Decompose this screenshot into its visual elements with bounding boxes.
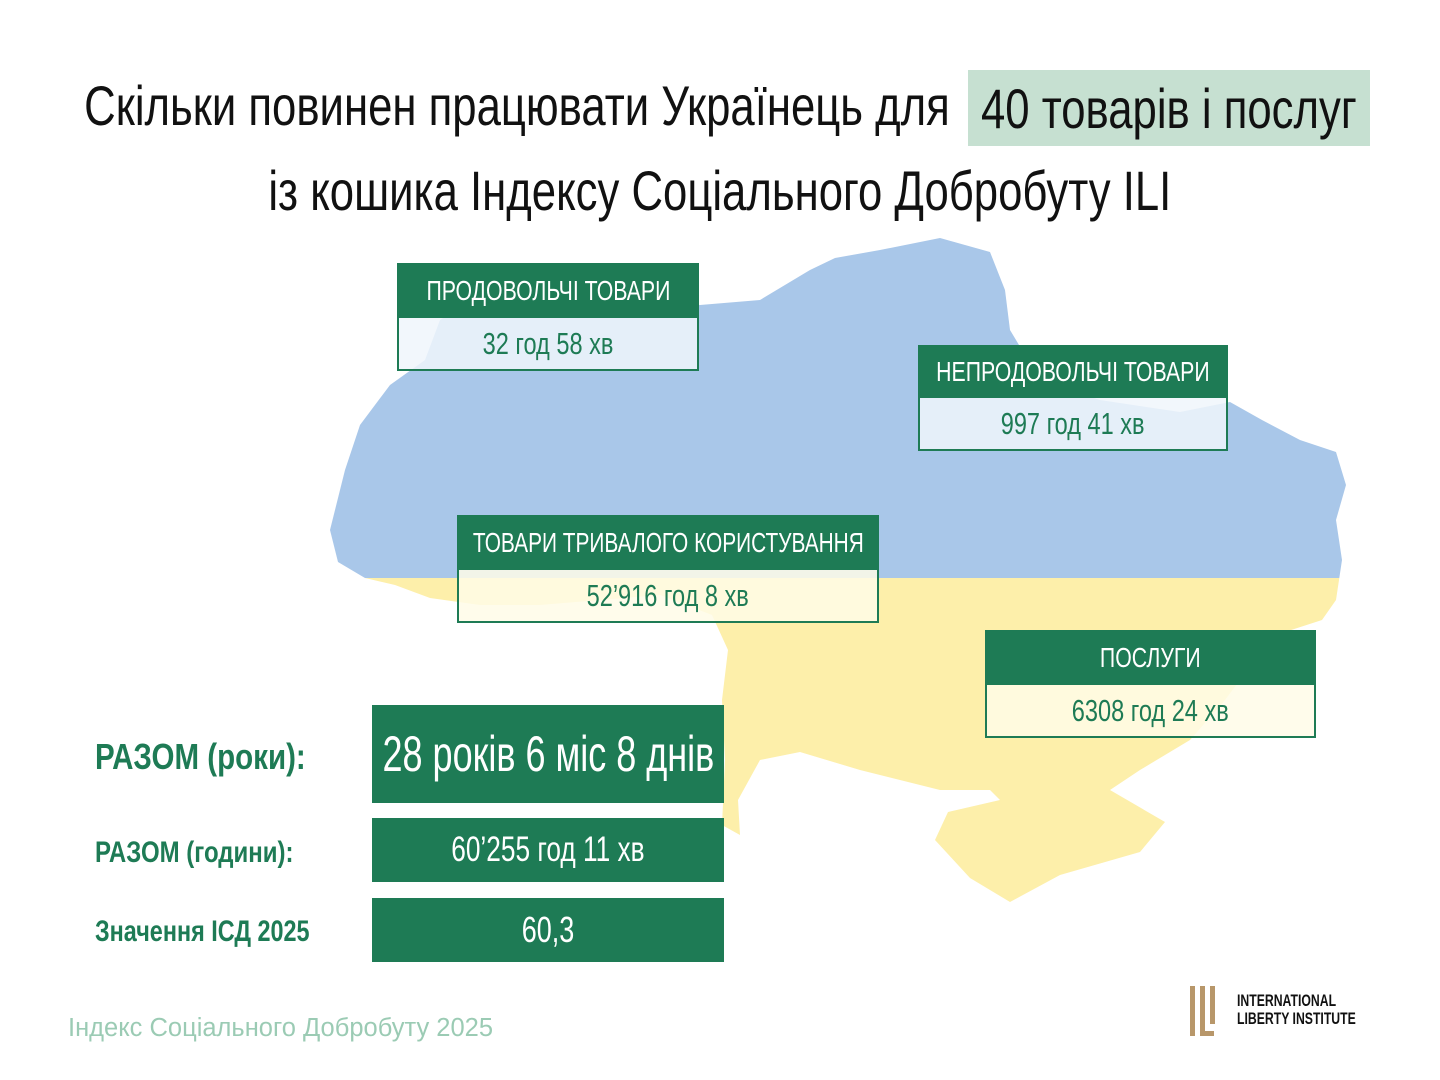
title: Скільки повинен працювати Українець для [84, 74, 950, 136]
label: total hours: РАЗОМ (години): [95, 836, 294, 869]
panel: durable: 52’916 год 8 хв [587, 578, 749, 612]
logo: INTERNATIONAL [1237, 991, 1336, 1010]
panel: non-food: НЕПРОДОВОЛЬЧІ ТОВАРИ [936, 356, 1210, 386]
panel: food: 32 год 58 хв [483, 326, 613, 360]
index box [372, 898, 724, 962]
panel: services: 6308 год 24 хв [1072, 692, 1229, 728]
total hours box: 60’255 год 11 хв [451, 830, 645, 869]
total hours box [372, 818, 724, 882]
label: total years: РАЗОМ (роки): [95, 736, 306, 777]
label: index: Значення ІСД 2025 [95, 915, 310, 948]
map: Ukraine [330, 238, 1346, 902]
index box: 60,3 [522, 909, 574, 950]
panel: food [397, 263, 699, 371]
panel: services: ПОСЛУГИ [1100, 642, 1201, 672]
title [84, 70, 1370, 222]
title: 40 товарів і послуг [981, 76, 1357, 140]
panel: non-food [918, 345, 1228, 451]
panel: services [985, 630, 1316, 738]
panel: durable [457, 515, 879, 623]
logo [1190, 986, 1356, 1036]
total years box [372, 705, 724, 803]
footer text: Індекс Соціального Добробуту 2025 [68, 1014, 493, 1042]
panel: food: ПРОДОВОЛЬЧІ ТОВАРИ [426, 274, 670, 306]
logo: LIBERTY INSTITUTE [1237, 1009, 1356, 1028]
panel: non-food: 997 год 41 хв [1001, 406, 1145, 440]
total years box: 28 років 6 міс 8 днів [382, 726, 714, 782]
title: із кошика Індексу Соціального Добробуту ILI [269, 158, 1171, 222]
panel: durable: ТОВАРИ ТРИВАЛОГО КОРИСТУВАННЯ [473, 526, 863, 558]
